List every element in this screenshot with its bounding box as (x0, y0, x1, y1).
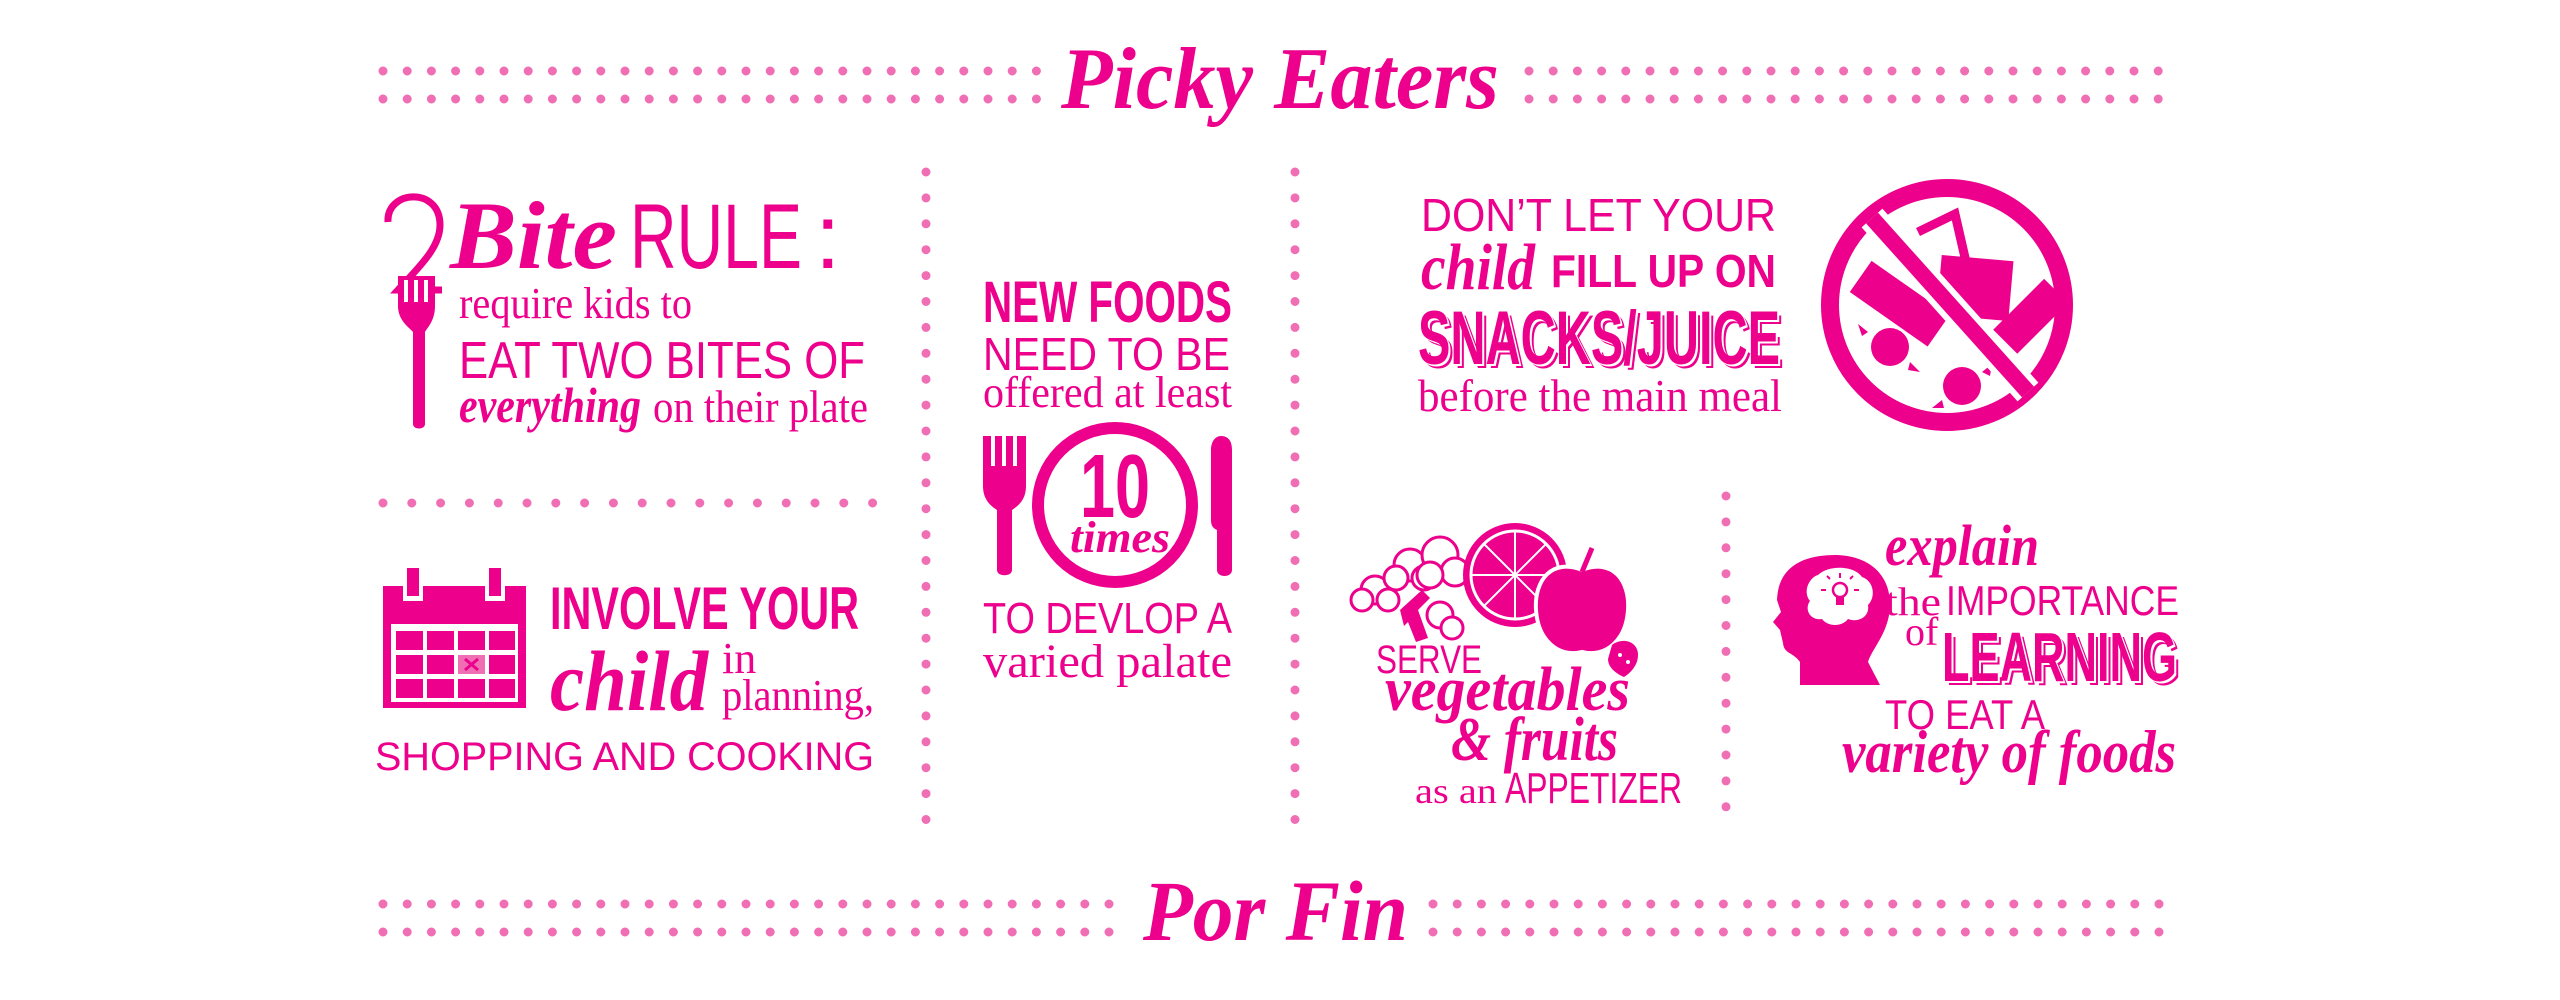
text: to develop palate (983, 594, 1233, 688)
text: snacks juice: before the main meal (1418, 370, 1782, 421)
panel: explain learning (1773, 513, 2181, 785)
text: explain importance: the (1885, 579, 1941, 624)
text: explain importance: TO EAT A (1885, 691, 2045, 738)
text: snacks juice (1418, 189, 1784, 421)
text: explain importance: explain (1885, 513, 2039, 578)
text: snacks juice: DON’T LET YOUR (1421, 189, 1776, 241)
text: explain importance (1842, 513, 2181, 785)
panel: snacks juice (1418, 188, 2068, 422)
text: explain importance: LEARNING (1942, 618, 2177, 696)
panel: serve vegetables and fruits (1351, 523, 1682, 813)
text: serve vegetables: APPETIZER (1505, 764, 1682, 813)
icon: plate with fork and knife: times (1070, 513, 1170, 562)
text: rule description: everything (459, 377, 641, 433)
footer title: Por Fin (1142, 863, 1408, 959)
text: new foods heading: offered at least (983, 368, 1232, 417)
icon: no snacks sign (1830, 188, 2068, 422)
text: to develop palate: TO DEVLOP A (983, 594, 1233, 643)
icon: number 2 fork (388, 197, 442, 428)
text: explain importance: of (1905, 609, 1939, 654)
icon: calendar (383, 568, 526, 708)
text: snacks juice: SNACKS/JUICE (1418, 296, 1780, 381)
panel: new foods 10 times (983, 270, 1233, 688)
heading: Bite RULE: : (815, 186, 841, 288)
text: snacks juice: SNACKS/JUICE (1420, 298, 1782, 383)
text: involve your child: in (722, 634, 756, 683)
text: serve vegetables: vegetables (1385, 656, 1630, 724)
text: involve your child: INVOLVE YOUR (550, 575, 859, 642)
text: involve your child: planning, (722, 671, 874, 720)
panel: involve your child (375, 568, 874, 779)
text: snacks juice: SNACKS/JUICE (1422, 300, 1784, 385)
text: serve vegetables: as an (1415, 771, 1497, 811)
text: explain importance: LEARNING (1944, 620, 2179, 698)
text: involve your child: SHOPPING AND COOKING (375, 735, 874, 779)
text: new foods heading: NEED TO BE (983, 328, 1230, 380)
icon: plate with fork and knife: 10 (1080, 437, 1150, 537)
text: explain importance: LEARNING (1946, 622, 2181, 700)
text: rule description (459, 279, 868, 433)
text: serve vegetables: & fruits (1451, 706, 1618, 774)
text: rule description: on their plate (653, 381, 868, 432)
text: new foods heading: NEW FOODS (983, 270, 1232, 335)
icon: fruits and vegetables (1351, 523, 1638, 677)
heading: Bite RULE (449, 182, 841, 289)
text: new foods heading (983, 270, 1232, 417)
title: Picky Eaters (1060, 31, 1499, 128)
heading: Bite RULE: Bite (449, 182, 617, 289)
text: snacks juice: FILL UP ON (1551, 245, 1776, 297)
text: to develop palate: varied palate (983, 635, 1232, 688)
text: serve vegetables: SERVE (1376, 638, 1482, 682)
text: snacks juice: child (1421, 231, 1536, 304)
icon: plate with fork and knife (983, 428, 1232, 582)
text: explain importance: variety of foods (1842, 719, 2176, 785)
icon: head with lightbulb brain (1773, 555, 1890, 685)
text: serve vegetables (1376, 638, 1682, 813)
text: rule description: EAT TWO BITES OF (459, 332, 865, 390)
heading: Bite RULE: RULE (630, 186, 802, 288)
panel: 2 bite rule (388, 182, 868, 433)
text: involve your child: child (550, 633, 710, 729)
dividers (383, 172, 1726, 820)
text: rule description: require kids to (459, 279, 692, 328)
text: explain importance: IMPORTANCE (1946, 577, 2179, 624)
text: involve your child (375, 575, 874, 779)
